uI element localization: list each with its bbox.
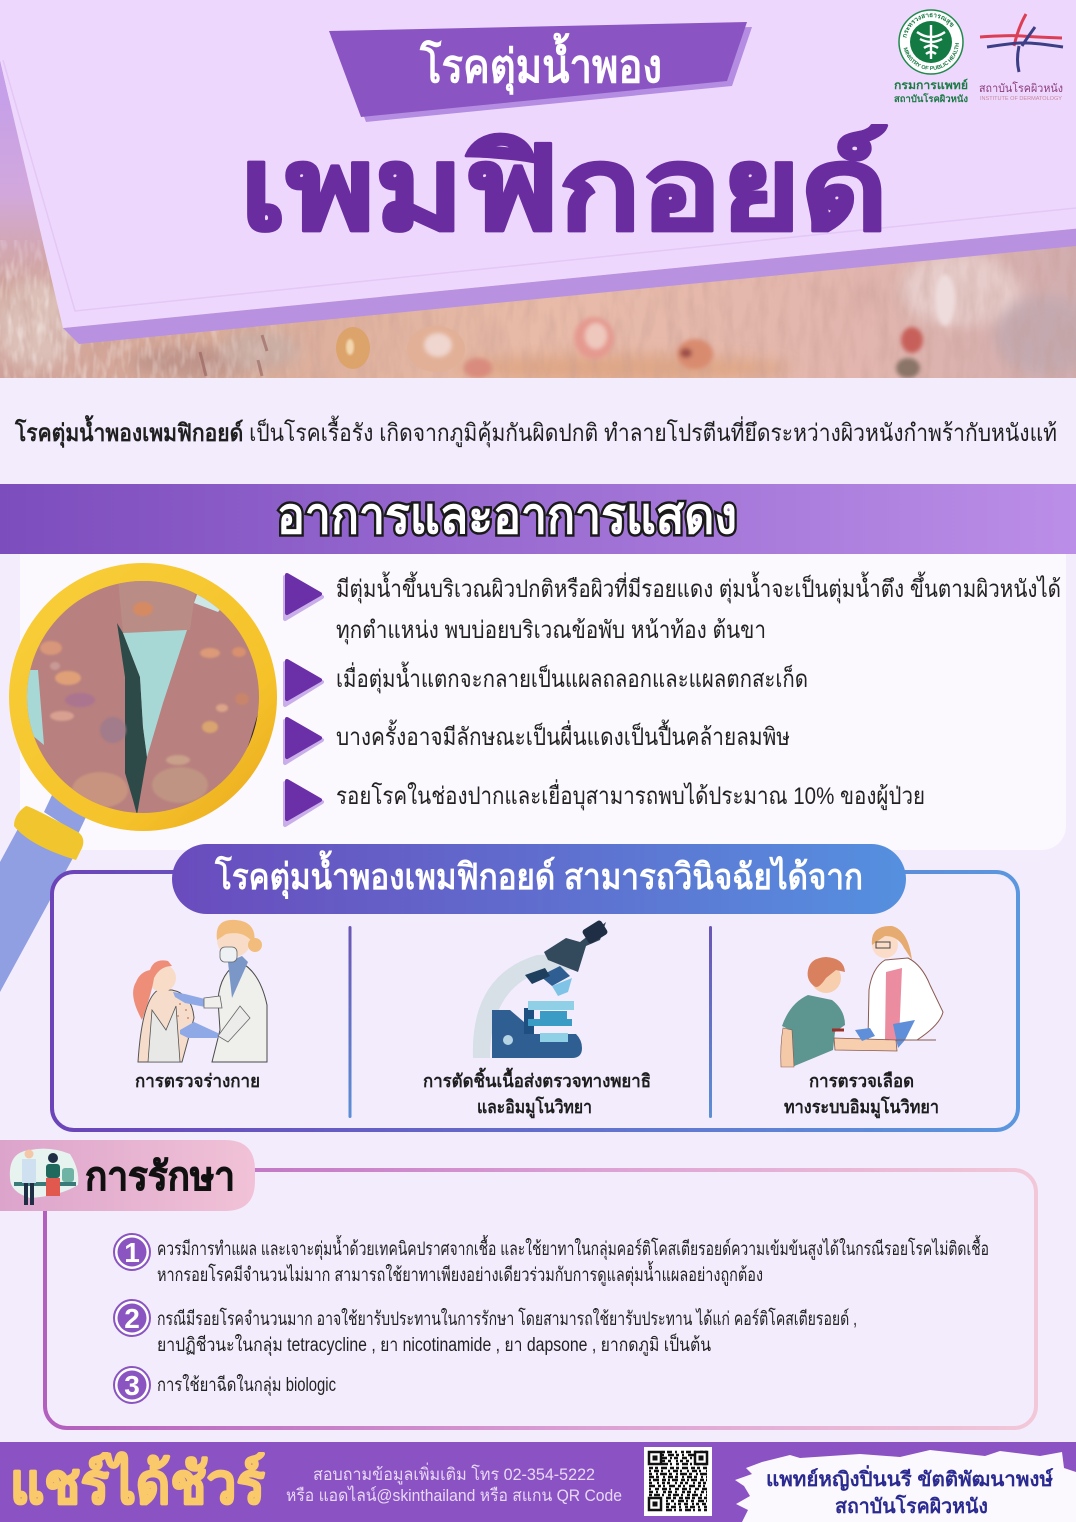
diagnosis heading pill: โรคตุ่มน้ำพองเพมฟิกอยด์ สามารถวินิจฉัยได้จาก [214, 850, 863, 900]
bullet: blister description: ทุกตำแหน่ง พบบ่อยบริเวณข้อพับ หน้าท้อง ต้นขา [336, 617, 766, 645]
item 1 text [157, 1235, 989, 1287]
footer contact text: หรือ แอดไลน์@skinthailand หรือ สแกน QR Code [286, 1485, 622, 1505]
icon: blood test [781, 926, 943, 1067]
divider right [709, 926, 712, 1118]
icon: microscope [473, 919, 609, 1058]
footer credit on brush stroke [735, 1450, 1076, 1522]
bullet: ruptured blisters [285, 661, 808, 705]
blister: pale [407, 326, 465, 372]
item 1 badge [114, 1234, 150, 1270]
logo: Department of Medical Services: สถาบันโรคผิวหนัง [894, 93, 968, 105]
section band: signs and symptoms: อาการและอาการแสดง [277, 488, 737, 544]
hero: lavender fade on the left of the panel [0, 60, 63, 328]
icon: doctor and patient [10, 1149, 78, 1205]
title banner: โรคตุ่มน้ำพอง [419, 32, 662, 95]
treatment heading pill: การรักษา [85, 1155, 235, 1199]
title banner [329, 22, 752, 122]
label: biopsy: การตัดชิ้นเนื้อส่งตรวจทางพยาธิ [423, 1067, 651, 1091]
treatment heading pill [0, 1140, 255, 1211]
label: blood test: การตรวจเลือด [809, 1071, 914, 1091]
item 3 badge [114, 1367, 150, 1403]
diagnosis heading pill [172, 844, 906, 914]
bullet: urticaria-like rash [285, 719, 790, 763]
item 3 badge: 3 [124, 1370, 140, 1401]
logo: Institute of Dermatology: INSTITUTE OF DERMATOLOGY [980, 96, 1062, 102]
bullet: oral lesions [285, 779, 925, 825]
logo: Department of Medical Services: กรมการแพทย์ [894, 78, 968, 92]
logo: Department of Medical Services: กระทรวงสาธารณสุข [903, 13, 954, 38]
item 2 badge: 2 [124, 1303, 140, 1334]
label: physical examination: การตรวจร่างกาย [135, 1071, 260, 1091]
bullet: urticaria-like rash: บางครั้งอาจมีลักษณะเป็นผื่นแดงเป็นปื้นคล้ายลมพิษ [336, 719, 790, 751]
label: blood test [784, 1071, 939, 1119]
panel: diagnosis frame [52, 872, 1018, 1130]
magnifier lens with blistered arms photograph [9, 563, 277, 831]
label: biopsy: และอิมมูโนวิทยา [477, 1096, 592, 1119]
item 1 badge: 1 [124, 1237, 140, 1268]
item 1 text: หากรอยโรคมีจำนวนไม่มาก สามารถใช้ยาทาเพียงอย่างเดียวร่วมกับการดูแลตุ่มน้ำแผลอย่างถูกต้อง [157, 1261, 763, 1287]
item 2 badge [114, 1300, 150, 1336]
item 2 text [157, 1307, 857, 1357]
footer slogan: แชร์ได้ชัวร์ [10, 1451, 265, 1515]
item 3 text: การใช้ยาฉีดในกลุ่ม biologic [157, 1374, 336, 1397]
panel: treatment frame [45, 1170, 1036, 1428]
QR code [644, 1447, 712, 1516]
bullet: ruptured blisters: เมื่อตุ่มน้ำแตกจะกลายเป็นแผลถลอกและแผลตกสะเก็ด [336, 661, 808, 694]
icon: physical examination [133, 920, 267, 1062]
logo: Department of Medical Services: MINISTRY OF PUBLIC HEALTH [904, 43, 959, 70]
logo: Institute of Dermatology: สถาบันโรคผิวหนัง [979, 81, 1063, 95]
magnifier handle [0, 795, 86, 992]
main title: เพมฟิกอยด์ [240, 124, 888, 254]
footer credit on brush stroke: สถาบันโรคผิวหนัง [835, 1494, 988, 1518]
footer band [0, 1442, 1076, 1522]
bullet: blister description [285, 571, 1061, 645]
hero: skin photograph background [0, 100, 1076, 382]
section band: signs and symptoms [0, 484, 1076, 554]
footer credit on brush stroke: แพทย์หญิงปิ่นนรี ขัตติพัฒนาพงษ์ [766, 1464, 1053, 1491]
divider left [348, 926, 352, 1118]
footer contact text: สอบถามข้อมูลเพิ่มเติม โทร 02-354-5222 [313, 1462, 595, 1485]
label: biopsy [423, 1067, 651, 1119]
logo: Institute of Dermatology [979, 14, 1063, 102]
hero: title panel shadow [63, 229, 1076, 344]
label: blood test: ทางระบบอิมมูโนวิทยา [784, 1096, 939, 1119]
hero: title panel [0, 0, 1076, 328]
footer contact text [286, 1462, 622, 1505]
blister: amber [336, 327, 370, 369]
item 2 text: ยาปฏิชีวนะในกลุ่ม tetracycline , ยา nicotinamide , ยา dapsone , ยากดภูมิ เป็นต้น [157, 1332, 711, 1357]
bullet: oral lesions: รอยโรคในช่องปากและเยื่อบุสามารถพบได้ประมาณ 10% ของผู้ป่วย [336, 779, 925, 811]
panel: symptoms background [20, 530, 1066, 850]
logo: Department of Medical Services [894, 9, 968, 105]
